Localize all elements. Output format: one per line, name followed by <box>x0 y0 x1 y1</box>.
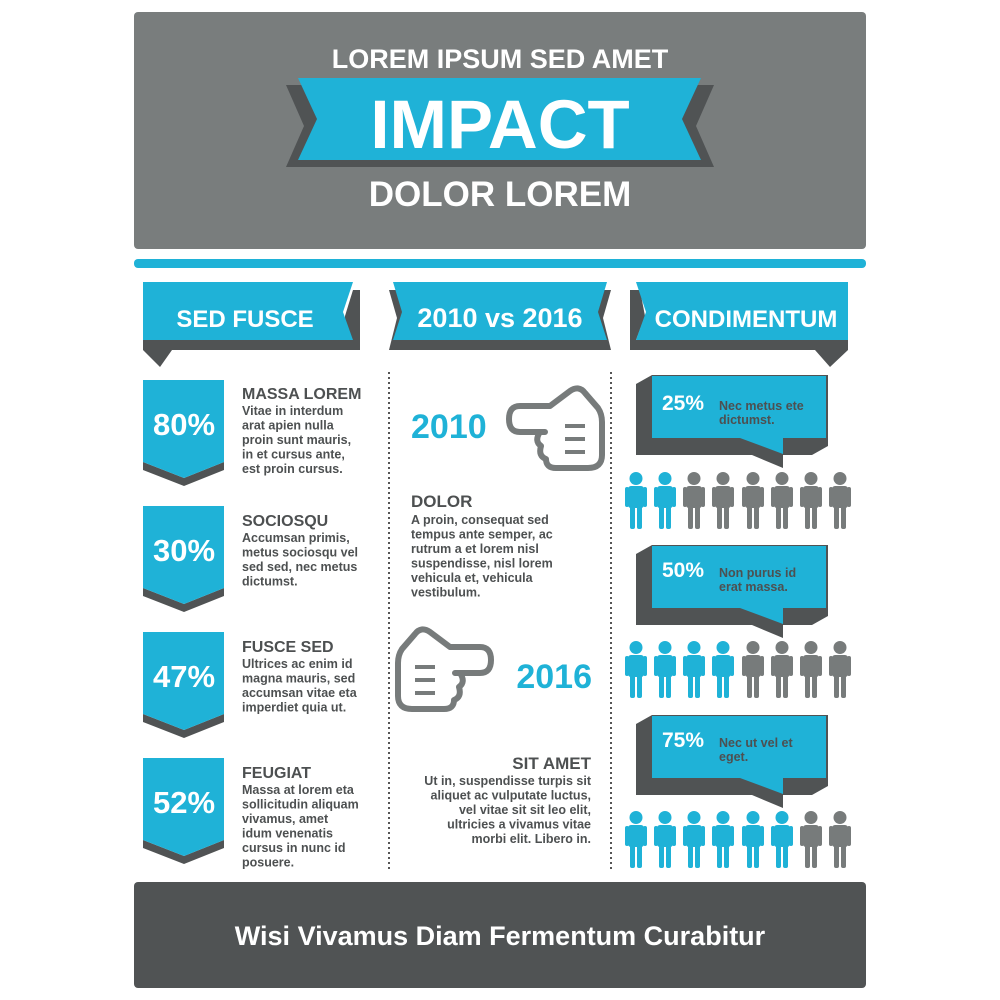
stat 52%: posuere. <box>242 856 294 870</box>
icon: hand pointing right <box>398 629 491 709</box>
header ribbon: IMPACT <box>370 86 630 163</box>
text: sit amet: aliquet ac vulputate luctus, <box>431 788 591 802</box>
header panel <box>134 12 866 249</box>
callout 25%: 25% <box>662 392 704 415</box>
stat 30%: 30% <box>153 533 215 568</box>
stat 80%: proin sunt mauris, <box>242 433 351 447</box>
header ribbon <box>286 78 714 167</box>
people row 25% <box>625 472 851 529</box>
banner: sed fusce: SED FUSCE <box>176 306 314 333</box>
stat 47%: accumsan vitae eta <box>242 686 358 700</box>
callout 25%: Nec metus ete <box>719 399 804 413</box>
banner: sed fusce <box>143 282 360 367</box>
callout 25%: dictumst. <box>719 413 775 427</box>
banner: 2010 vs 2016 <box>389 282 611 350</box>
text: dolor: rutrum a et lorem nisl <box>411 542 539 556</box>
banner: 2010 vs 2016: 2010 vs 2016 <box>417 303 583 333</box>
text: dolor: vestibulum. <box>411 586 480 600</box>
divider dotted lines <box>389 372 611 872</box>
callout 75%: 75% <box>662 729 704 752</box>
stat 80% <box>143 380 361 486</box>
stat 80%: MASSA LOREM <box>242 386 361 403</box>
text: sit amet: morbi elit. Libero in. <box>472 832 591 846</box>
stat 47%: Ultrices ac enim id <box>242 657 352 671</box>
text: sit amet: ultricies a vivamus vitae <box>447 818 591 832</box>
stat 47%: 47% <box>153 659 215 694</box>
text: sit amet: Ut in, suspendisse turpis sit <box>424 774 592 788</box>
stat 30%: Accumsan primis, <box>242 531 350 545</box>
stat 30%: SOCIOSQU <box>242 513 328 530</box>
callout 50%: Non purus id <box>719 566 796 580</box>
stat 30% <box>143 506 358 612</box>
stat 52%: cursus in nunc id <box>242 841 346 855</box>
people row 50% <box>625 641 851 698</box>
text: sit amet: vel vitae sit sit leo elit, <box>459 803 591 817</box>
year 2016: 2016 <box>516 658 592 696</box>
text: dolor: A proin, consequat sed <box>411 513 549 527</box>
stat 30%: sed sed, nec metus <box>242 560 357 574</box>
callout 50% <box>636 545 828 638</box>
stat 47%: imperdiet quia ut. <box>242 700 346 714</box>
stat 80%: est proin cursus. <box>242 462 343 476</box>
banner: condimentum: CONDIMENTUM <box>655 306 837 333</box>
stat 52%: sollicitudin aliquam <box>242 798 359 812</box>
stat 52%: idum venenatis <box>242 826 333 840</box>
stat 80%: in et cursus ante, <box>242 448 345 462</box>
stat 52%: 52% <box>153 785 215 820</box>
stat 52%: Massa at lorem eta <box>242 783 355 797</box>
callout 50%: 50% <box>662 559 704 582</box>
callout 50%: erat massa. <box>719 580 788 594</box>
callout 75% <box>636 715 828 808</box>
header subtitle top: LOREM IPSUM SED AMET <box>332 44 669 74</box>
stat 80%: arat apien nulla <box>242 418 335 432</box>
stat 52% <box>143 758 359 870</box>
text: sit amet <box>424 754 592 846</box>
stat 30%: metus sociosqu vel <box>242 546 358 560</box>
stat 30%: dictumst. <box>242 574 298 588</box>
text: dolor <box>411 492 553 600</box>
stat 80%: Vitae in interdum <box>242 404 343 418</box>
stat 80%: 80% <box>153 407 215 442</box>
text: dolor: vehicula et, vehicula <box>411 571 534 585</box>
stat 52%: FEUGIAT <box>242 765 311 782</box>
callout 75%: Nec ut vel et <box>719 736 793 750</box>
text: dolor: suspendisse, nisl lorem <box>411 556 553 570</box>
stat 52%: vivamus, amet <box>242 812 329 826</box>
stat 47%: FUSCE SED <box>242 639 334 656</box>
header subtitle bottom: DOLOR LOREM <box>369 175 631 214</box>
callout 75%: eget. <box>719 750 748 764</box>
footer <box>134 882 866 988</box>
text: dolor: DOLOR <box>411 492 472 511</box>
callout 25% <box>636 375 828 468</box>
text: dolor: tempus ante semper, ac <box>411 528 553 542</box>
people row 75% <box>625 811 851 868</box>
year 2010: 2010 <box>411 408 487 446</box>
icon: hand pointing left <box>509 388 602 468</box>
text: sit amet: SIT AMET <box>512 754 592 773</box>
banner: condimentum <box>630 282 848 367</box>
stat 47% <box>143 632 358 738</box>
stat 47%: magna mauris, sed <box>242 672 355 686</box>
footer: Wisi Vivamus Diam Fermentum Curabitur <box>235 921 766 951</box>
